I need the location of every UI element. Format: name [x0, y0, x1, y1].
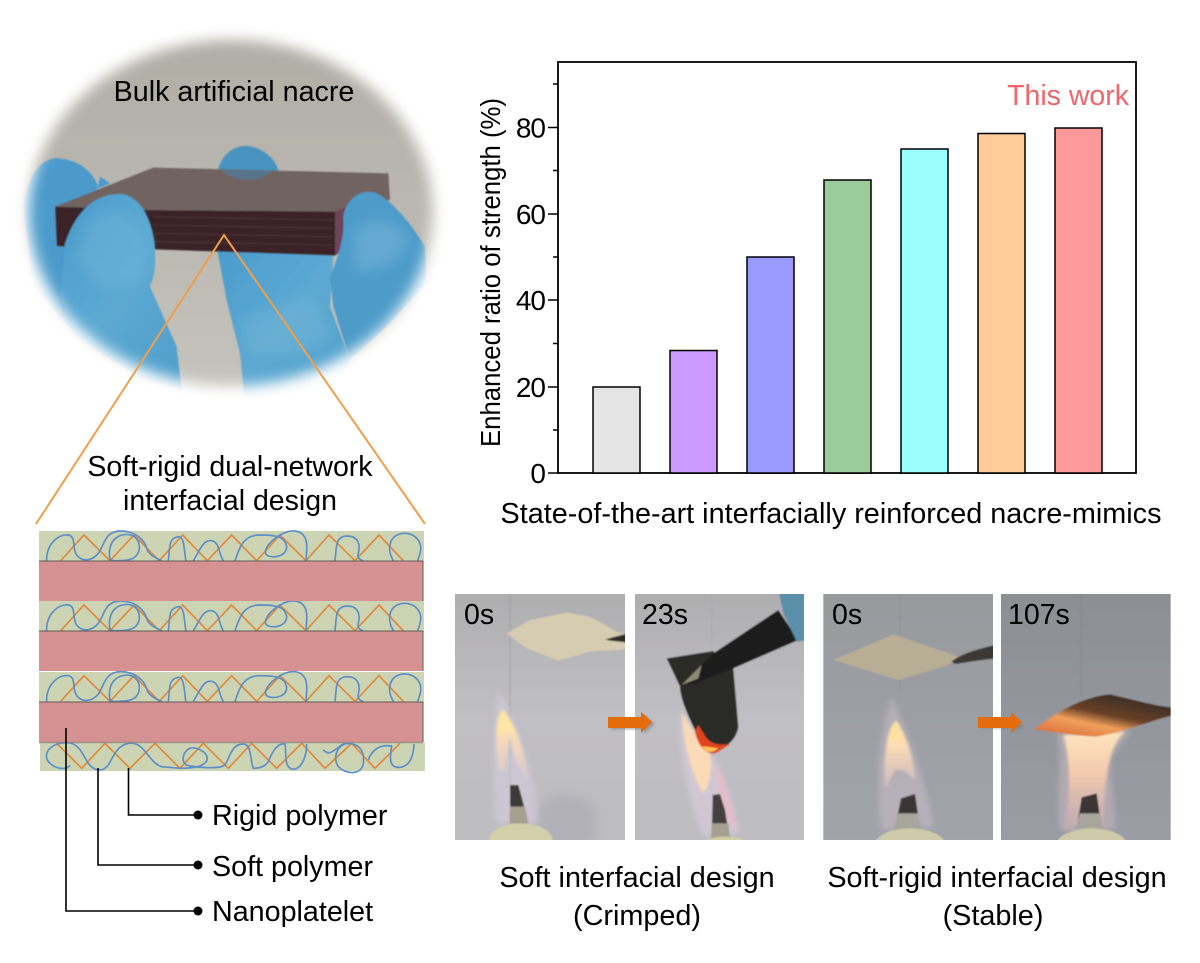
- y axis tick labels: 60: [516, 199, 545, 230]
- callout: nanoplatelet: Nanoplatelet: [212, 896, 373, 928]
- y axis tick labels: [516, 112, 545, 489]
- diagram: layered nanoplatelet and polymer structure: [39, 531, 425, 773]
- caption: soft-rigid interfacial design: (Stable): [943, 900, 1043, 932]
- polymer network row 1: [47, 531, 421, 561]
- title: bulk artificial nacre: Bulk artificial nacre: [114, 76, 354, 108]
- nacre plate top face: [55, 168, 390, 212]
- heading: soft-rigid dual-network interfacial design: interfacial design: [123, 485, 337, 517]
- time stamp: 107s: 107s: [1008, 599, 1070, 631]
- photo pair: soft interfacial design: [455, 594, 804, 840]
- callout: soft polymer: Soft polymer: [212, 851, 373, 883]
- y axis title: Enhanced ratio of strength (%): [475, 98, 506, 447]
- zoom lines from plate to diagram: [36, 235, 425, 524]
- label: this work: This work: [1007, 80, 1130, 112]
- arrow shadow: [611, 714, 655, 734]
- polymer interlayer bands: [39, 531, 425, 771]
- heading: soft-rigid dual-network interfacial design: Soft-rigid dual-network: [87, 451, 373, 483]
- callout: nanoplatelet: [66, 728, 373, 928]
- right glove finger: [330, 192, 427, 360]
- back glove fingertip: [218, 145, 279, 172]
- photo: 23s soft: [632, 590, 808, 851]
- chart axes frame: [558, 62, 1136, 473]
- photo: 107s stable: [1001, 594, 1171, 840]
- photo pair: soft-rigid interfacial design: [823, 594, 1171, 840]
- photo: 0s stable: [823, 594, 993, 840]
- x axis caption: State-of-the-art interfacially reinforced nacre-mimics: [501, 498, 1161, 530]
- polymer network row 3: [47, 672, 421, 701]
- callout: rigid polymer: Rigid polymer: [212, 800, 388, 832]
- arrow: stable sequence: [978, 712, 1022, 733]
- y axis ticks: [548, 84, 558, 473]
- time stamp: 0s: 0s: [464, 599, 494, 631]
- caption: soft interfacial design: Soft interfacial design: [499, 862, 775, 894]
- nanoplatelet layers: [39, 561, 423, 742]
- bars: [593, 128, 1102, 473]
- heading: soft-rigid dual-network interfacial design: [87, 451, 373, 517]
- bar chart: enhanced ratio of strength: [475, 62, 1136, 489]
- y axis tick labels: 0: [530, 458, 545, 489]
- callout: rigid polymer: [128, 768, 388, 832]
- caption: soft interfacial design: [499, 862, 775, 932]
- photo: 0s soft: [455, 594, 625, 840]
- caption: soft interfacial design: (Crimped): [573, 900, 701, 932]
- polymer network row 4: [46, 743, 414, 773]
- nacre plate front face: [55, 207, 335, 256]
- y axis tick labels: 80: [516, 112, 545, 144]
- front thumb: [60, 194, 182, 390]
- arrow: soft sequence: [608, 712, 652, 733]
- lower centre finger: [217, 247, 350, 403]
- polymer network row 2: [47, 601, 421, 631]
- time stamp: 0s: 0s: [832, 599, 862, 631]
- photo: bulk artificial nacre held in gloved fingers: [21, 31, 441, 396]
- caption: soft-rigid interfacial design: [827, 862, 1167, 932]
- callout: soft polymer: [98, 768, 373, 883]
- caption: soft-rigid interfacial design: Soft-rigid interfacial design: [827, 862, 1167, 894]
- time stamp: 23s: 23s: [642, 599, 688, 631]
- arrow shadow: [980, 716, 1024, 733]
- left rear finger: [23, 158, 110, 340]
- y axis tick labels: 40: [516, 285, 545, 316]
- y axis tick labels: 20: [516, 372, 545, 403]
